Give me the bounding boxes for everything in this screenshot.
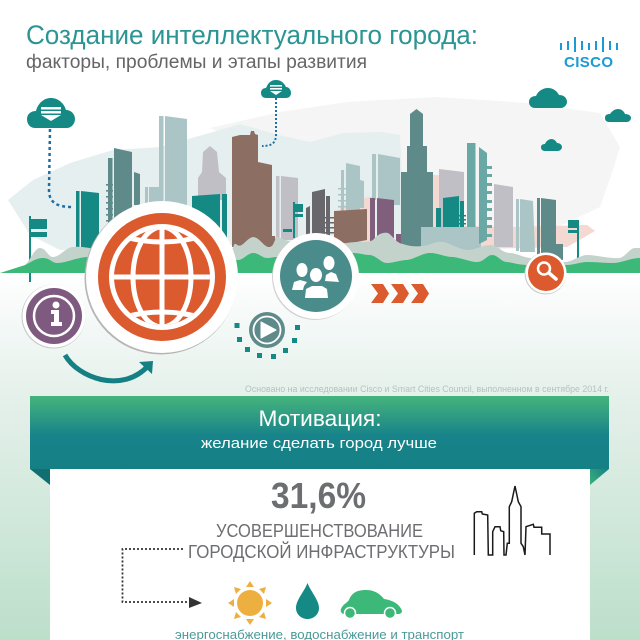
building: pale blue slab [516, 199, 535, 252]
subtitle: факторы, проблемы и этапы развития [26, 52, 367, 73]
banner [30, 396, 609, 469]
icon: cloud right large [529, 88, 567, 108]
building: lavender right [439, 169, 464, 230]
dotted connector: left cloud [49, 129, 72, 207]
banner fold right [590, 469, 609, 485]
icon: info badge [22, 284, 86, 348]
dotted connector: top cloud [262, 98, 276, 146]
building: dark grey cluster [306, 189, 334, 236]
icon: people badge [272, 233, 359, 320]
banner heading: Мотивация: [258, 406, 382, 431]
building: left teal [76, 191, 99, 251]
icon: cloud far right [605, 109, 631, 122]
statistic label: ГОРОДСКОЙ ИНФРАСТРУКТУРЫ [188, 541, 455, 562]
banner subheading: желание сделать город лучше [201, 435, 437, 452]
building: lavender stepped tower [198, 146, 226, 200]
page background [0, 272, 640, 640]
building: dark teal spire [401, 109, 433, 252]
building: teal centre [192, 194, 227, 240]
logo: cisco: CISCO [564, 54, 613, 71]
flag sign: left [29, 216, 47, 282]
icon: magnifier badge [524, 252, 566, 294]
statistic label: УСОВЕРШЕНСТВОВАНИЕ [216, 521, 423, 541]
panel: motivation [30, 396, 609, 640]
statistic: 31,6% [271, 475, 366, 516]
statistic label [188, 521, 455, 562]
title: Создание интеллектуального города: [26, 20, 478, 50]
city background washes [8, 97, 620, 250]
arrow: curved teal [65, 355, 153, 381]
icon: download cloud top [261, 80, 291, 98]
icon: car [341, 590, 402, 618]
building: grey slab [276, 176, 298, 240]
banner fold left [30, 469, 50, 485]
building: lavender slab [494, 184, 513, 247]
building: pale block [421, 227, 481, 252]
icon: globe badge [84, 201, 238, 354]
dotted arrow [122, 549, 202, 608]
icon: cloud small [541, 139, 562, 151]
green ground [0, 253, 640, 273]
icon: play button with dots [234, 312, 300, 359]
building: pale blue mid towers [338, 163, 364, 212]
icon: water drop [296, 583, 319, 619]
building: ribbed teal [467, 143, 492, 244]
building: pale blue high-rise [145, 116, 187, 211]
white card [50, 469, 590, 640]
flag sign: right [568, 220, 579, 260]
icon: skyline outline [474, 486, 550, 555]
building: grey-green slab [537, 198, 563, 260]
source note: Основано на исследовании Cisco и Smart Cities Council, выполненном в сентябре 2014 г. [245, 384, 609, 395]
building: grey-green tower group [106, 148, 140, 232]
hills [15, 233, 640, 272]
chevrons [371, 284, 429, 303]
city skyline [76, 109, 563, 260]
icon: download cloud left [27, 98, 75, 128]
building: brown block [334, 209, 367, 244]
logo: cisco [560, 37, 618, 71]
building: teal small group [436, 196, 466, 227]
icon: sun [228, 581, 272, 625]
building: brown tower [232, 131, 276, 247]
building: pale blue right [372, 154, 400, 205]
building: purple [370, 198, 406, 252]
flag sign: centre [283, 202, 303, 238]
